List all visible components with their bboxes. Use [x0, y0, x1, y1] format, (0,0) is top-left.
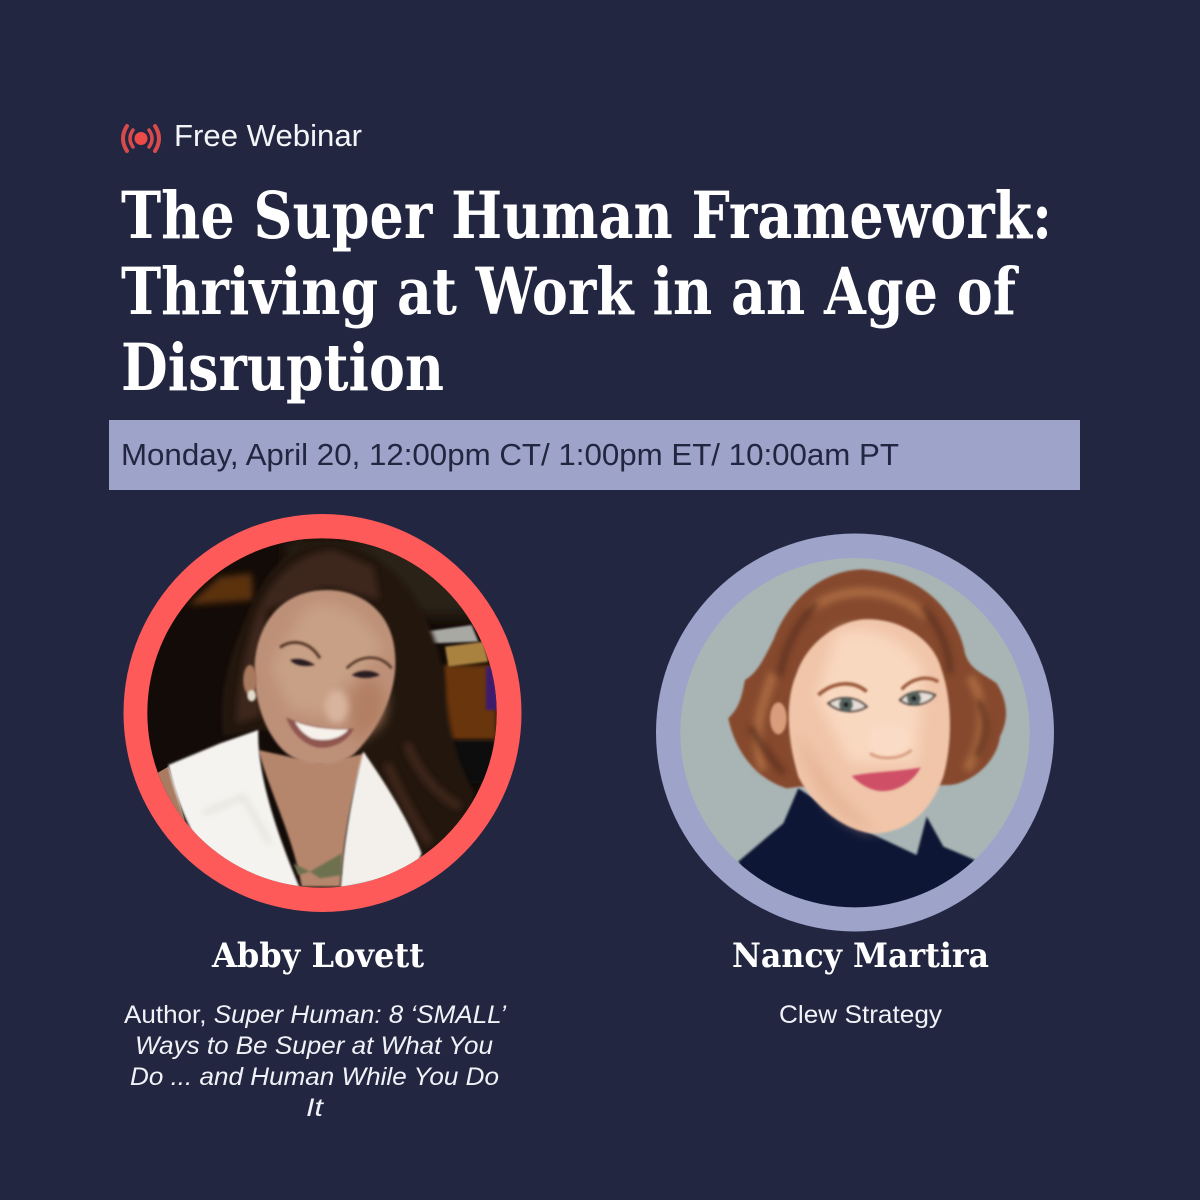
- date and time bar: [109, 420, 1080, 490]
- speaker role: Nancy Martira: Clew Strategy: [779, 1001, 943, 1029]
- title: [121, 178, 1052, 406]
- shirt: [168, 730, 300, 888]
- speaker role: Abby Lovett: [124, 1001, 506, 1122]
- hair: [728, 569, 1006, 788]
- label: Free Webinar: Free Webinar: [174, 118, 362, 153]
- icon: live broadcast signal: [123, 126, 159, 151]
- neck and chest: [258, 750, 365, 887]
- speaker name: Nancy Martira: Nancy Martira: [732, 936, 989, 976]
- portrait: Nancy Martira: [650, 530, 1060, 940]
- necklace: [293, 853, 342, 878]
- title: Thriving at Work in an Age of: [121, 254, 1019, 330]
- speaker role: Abby Lovett: Do ... and Human While You Do: [130, 1063, 499, 1091]
- face: [789, 619, 950, 833]
- speaker role: Abby Lovett: Ways to Be Super at What You: [135, 1032, 493, 1060]
- nose shadow: [870, 750, 912, 758]
- webinar promotional card: [109, 124, 1080, 1116]
- date and time bar: Monday, April 20, 12:00pm CT/ 1:00pm ET/ 10:00am PT: [121, 437, 899, 472]
- sweater: [738, 788, 975, 910]
- speaker name: Abby Lovett: Abby Lovett: [211, 936, 424, 976]
- brows, eyes and nose: [280, 642, 392, 678]
- portrait: Abby Lovett: [120, 510, 530, 920]
- face: [255, 590, 395, 765]
- brows: [818, 684, 867, 695]
- hair: [222, 541, 475, 857]
- speaker role: Abby Lovett: It: [306, 1094, 324, 1122]
- title: Disruption: [121, 330, 444, 406]
- speaker role: Abby Lovett: Author, Super Human: 8 ‘SMALL’: [124, 1001, 506, 1029]
- lips: [852, 767, 921, 791]
- eyes: [828, 698, 867, 711]
- smile: [286, 717, 354, 748]
